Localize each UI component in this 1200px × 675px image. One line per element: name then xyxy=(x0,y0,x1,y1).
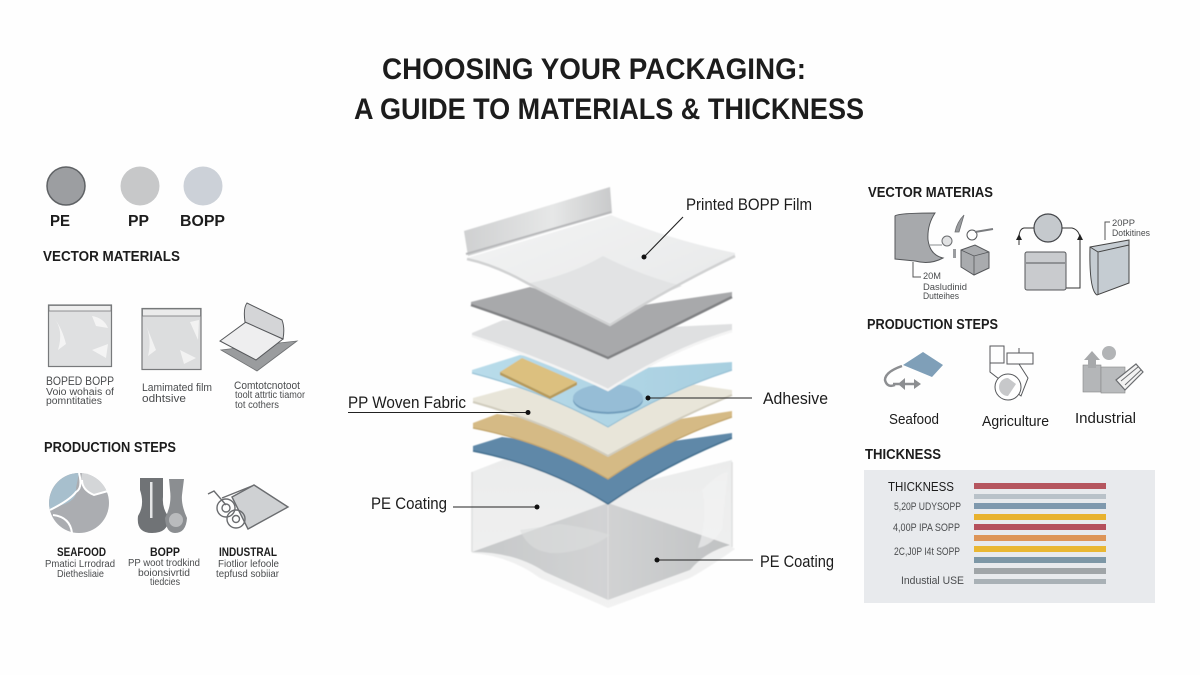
chart labels xyxy=(888,480,964,587)
callout: PP woven fabric: PP Woven Fabric xyxy=(348,394,466,412)
chart labels: THICKNESS xyxy=(888,480,954,494)
chart labels: 2C,J0P I4t SOPP xyxy=(894,546,960,558)
heading: thickness: THICKNESS xyxy=(865,447,941,463)
layer: dark gray xyxy=(471,287,732,358)
exploded layer stack xyxy=(464,187,735,608)
production icons xyxy=(45,473,288,588)
callout: printed BOPP film: Printed BOPP Film xyxy=(686,196,812,214)
diagram: material flow right: Dotkitines xyxy=(1112,228,1150,238)
layer: printed BOPP film with seal tab xyxy=(464,187,735,325)
icon: seafood disc xyxy=(49,473,109,533)
callout: PP woven fabric xyxy=(348,394,530,415)
callout: PE coating right: PE Coating xyxy=(760,553,834,571)
icon: laminated film pouch xyxy=(142,308,201,370)
callout: printed BOPP film xyxy=(642,196,812,260)
caption: BOPP: PP woot trodkind xyxy=(128,558,200,569)
blue adhesive disc xyxy=(573,384,643,414)
callout: PE coating left xyxy=(371,495,540,513)
bar chart xyxy=(974,483,1106,584)
icon: folded sheet xyxy=(220,303,297,371)
title: CHOOSING YOUR PACKAGING: xyxy=(382,53,806,86)
heading: vector materias: VECTOR MATERIAS xyxy=(868,185,993,201)
caption: BOPP xyxy=(128,547,200,588)
diagram: material flow left xyxy=(895,213,993,301)
layer: PP woven fabric xyxy=(473,384,732,456)
caption: laminated film xyxy=(142,382,212,405)
caption: BOPP: Voio wohais of xyxy=(46,387,114,398)
label: industrial: Industrial xyxy=(1075,411,1136,427)
caption: BOPP: tiedcies xyxy=(150,577,180,588)
caption: industrial: INDUSTRAL xyxy=(219,547,277,559)
chart labels: 5,20P UDYSOPP xyxy=(894,501,961,513)
material swatches: BOPP xyxy=(180,213,225,230)
diagram: material flow left: Dutteihes xyxy=(923,291,959,301)
callout: adhesive: Adhesive xyxy=(763,390,828,408)
diagram: material flow left: 20M xyxy=(923,271,941,281)
heading: production steps: PRODUCTION STEPS xyxy=(867,317,998,333)
layer: clear PE pouch xyxy=(472,459,735,608)
caption: coated: Comtotcnotoot xyxy=(234,380,300,392)
chart labels: Industial USE xyxy=(901,575,964,587)
caption: seafood xyxy=(45,547,115,580)
icon: industrial xyxy=(1083,346,1143,393)
caption: laminated film: Lamimated film xyxy=(142,382,212,394)
caption: industrial: tepfusd sobiiar xyxy=(216,569,280,580)
callout: PE coating right xyxy=(654,553,834,571)
icon: agriculture xyxy=(990,346,1033,400)
caption: seafood: SEAFOOD xyxy=(57,547,106,559)
caption: coated xyxy=(234,380,306,411)
caption: BOPP xyxy=(46,376,114,407)
caption: BOPP: BOPED BOPP xyxy=(46,376,114,388)
heading: production steps: PRODUCTION STEPS xyxy=(44,440,176,456)
panel: right column xyxy=(864,185,1155,603)
caption: BOPP: pomntitaties xyxy=(46,396,102,407)
material swatches xyxy=(47,166,225,230)
yellow sponge xyxy=(500,358,577,399)
caption: BOPP: BOPP xyxy=(150,547,180,559)
diagram: material flow left: Dasludinid xyxy=(923,282,967,292)
title: A GUIDE TO MATERIALS & THICKNESS xyxy=(354,93,864,126)
heading: vector materials: VECTOR MATERIALS xyxy=(43,249,180,265)
label: agriculture: Agriculture xyxy=(982,414,1049,430)
layer: blue film xyxy=(472,355,732,427)
caption: seafood: Diethesliaie xyxy=(57,569,104,580)
label: seafood: Seafood xyxy=(889,412,939,428)
caption: coated: toolt attrtic tiamor xyxy=(235,390,306,401)
icon: BOPP tools xyxy=(138,478,187,533)
diagram: material flow right xyxy=(1016,214,1150,295)
material swatches: PP xyxy=(128,213,149,230)
material swatches: PE xyxy=(50,213,70,230)
chart labels: 4,00P IPA SOPP xyxy=(893,522,960,534)
icon: industrial sheet and rings xyxy=(208,485,288,529)
layer: tan xyxy=(473,411,732,479)
material samples xyxy=(46,303,306,411)
icon: seafood xyxy=(885,352,943,390)
caption: laminated film: odhtsive xyxy=(142,393,186,405)
icon: BOPP pouch xyxy=(48,305,112,366)
panel: thickness chart xyxy=(864,470,1155,603)
caption: coated: tot cothers xyxy=(235,400,279,411)
layer: dark blue xyxy=(473,433,732,504)
title xyxy=(354,53,864,126)
callout: PE coating left: PE Coating xyxy=(371,495,447,513)
caption: seafood: Pmatici Lrrodrad xyxy=(45,559,115,570)
panel: left column xyxy=(43,166,306,588)
callout: adhesive xyxy=(646,390,828,408)
caption: BOPP: boionsivrtid xyxy=(138,568,190,579)
layer: white textured sheet xyxy=(472,320,732,390)
caption: industrial xyxy=(216,547,280,580)
diagram: material flow right: 20PP xyxy=(1112,218,1135,228)
caption: industrial: Fiotlior lefoole xyxy=(218,559,279,570)
